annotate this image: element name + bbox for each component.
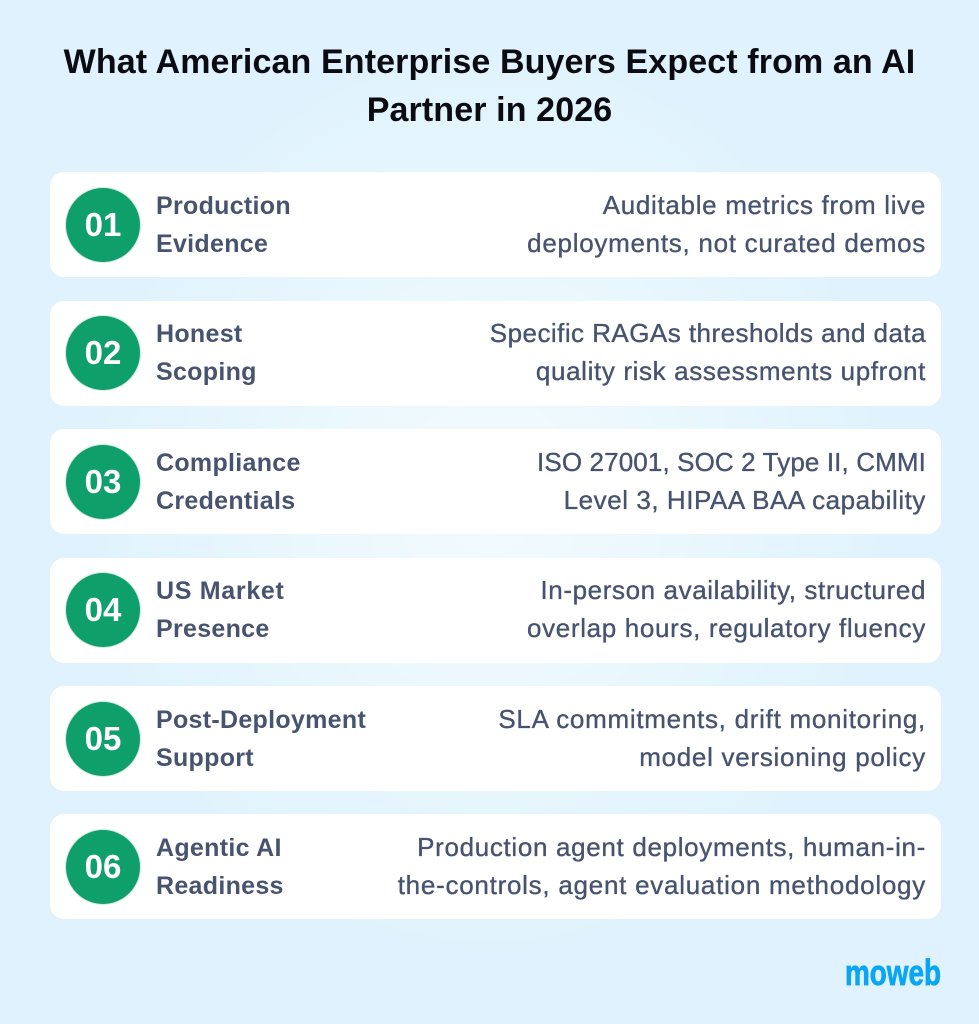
- heading: Agentic AI Readiness: Agentic AI: [156, 834, 282, 862]
- heading: Post-Deployment Support: [156, 706, 366, 772]
- heading: Compliance Credentials: Compliance: [156, 449, 301, 477]
- description: [537, 447, 926, 515]
- description: ISO 27001, SOC 2 Type II, CMMI: [537, 447, 926, 477]
- description: overlap hours, regulatory fluency: [527, 613, 926, 643]
- number badge 05: [66, 702, 140, 776]
- description: [498, 704, 926, 772]
- logo: moweb: moweb: [845, 952, 941, 993]
- number badge 02: 02: [85, 334, 121, 371]
- title: [64, 43, 915, 129]
- heading: Production Evidence: [156, 192, 291, 258]
- description: quality risk assessments upfront: [536, 356, 926, 386]
- panel: 03 Compliance Credentials: [50, 429, 941, 534]
- heading: Production Evidence: Production: [156, 192, 291, 220]
- heading: Production Evidence: Evidence: [156, 230, 268, 258]
- number badge 06: [66, 830, 140, 904]
- heading: Agentic AI Readiness: Readiness: [156, 872, 284, 900]
- panel: 04 US Market Presence: [50, 558, 941, 663]
- heading: Post-Deployment Support: Support: [156, 744, 254, 772]
- heading: Compliance Credentials: [156, 449, 301, 515]
- title: Partner in 2026: [367, 91, 612, 129]
- number badge 01: 01: [85, 206, 121, 243]
- description: [527, 190, 926, 258]
- heading: Agentic AI Readiness: [156, 834, 284, 900]
- description: [398, 832, 926, 900]
- description: [527, 575, 926, 643]
- heading: Compliance Credentials: Credentials: [156, 487, 295, 515]
- heading: Honest Scoping: Scoping: [156, 358, 257, 386]
- panel: 01 Production Evidence: [50, 172, 941, 277]
- panel: 02 Honest Scoping: [50, 301, 941, 406]
- number badge 05: 05: [85, 720, 121, 757]
- number badge 06: 06: [85, 848, 121, 885]
- heading: Honest Scoping: Honest: [156, 320, 243, 348]
- heading: US Market Presence: Presence: [156, 615, 270, 643]
- number badge 02: [66, 316, 140, 390]
- description: Production agent deployments, human-in-: [417, 832, 926, 862]
- number badge 01: [66, 188, 140, 262]
- heading: US Market Presence: US Market: [156, 577, 285, 605]
- panel: 06 Agentic AI Readiness: [50, 814, 941, 919]
- number badge 04: 04: [85, 591, 121, 628]
- number badge 03: [66, 445, 140, 519]
- title: What American Enterprise Buyers Expect from an AI: [64, 43, 915, 81]
- description: Level 3, HIPAA BAA capability: [564, 485, 926, 515]
- heading: Post-Deployment Support: Post-Deployment: [156, 706, 366, 734]
- number badge 03: 03: [85, 463, 121, 500]
- description: Auditable metrics from live: [603, 190, 926, 220]
- heading: Honest Scoping: [156, 320, 257, 386]
- description: model versioning policy: [639, 742, 926, 772]
- description: In-person availability, structured: [540, 575, 926, 605]
- number badge 04: [66, 573, 140, 647]
- description: SLA commitments, drift monitoring,: [498, 704, 926, 734]
- description: Specific RAGAs thresholds and data: [490, 318, 926, 348]
- description: deployments, not curated demos: [527, 228, 926, 258]
- panel: 05 Post-Deployment Support: [50, 686, 941, 791]
- heading: US Market Presence: [156, 577, 285, 643]
- description: [490, 318, 926, 386]
- description: the-controls, agent evaluation methodology: [398, 870, 926, 900]
